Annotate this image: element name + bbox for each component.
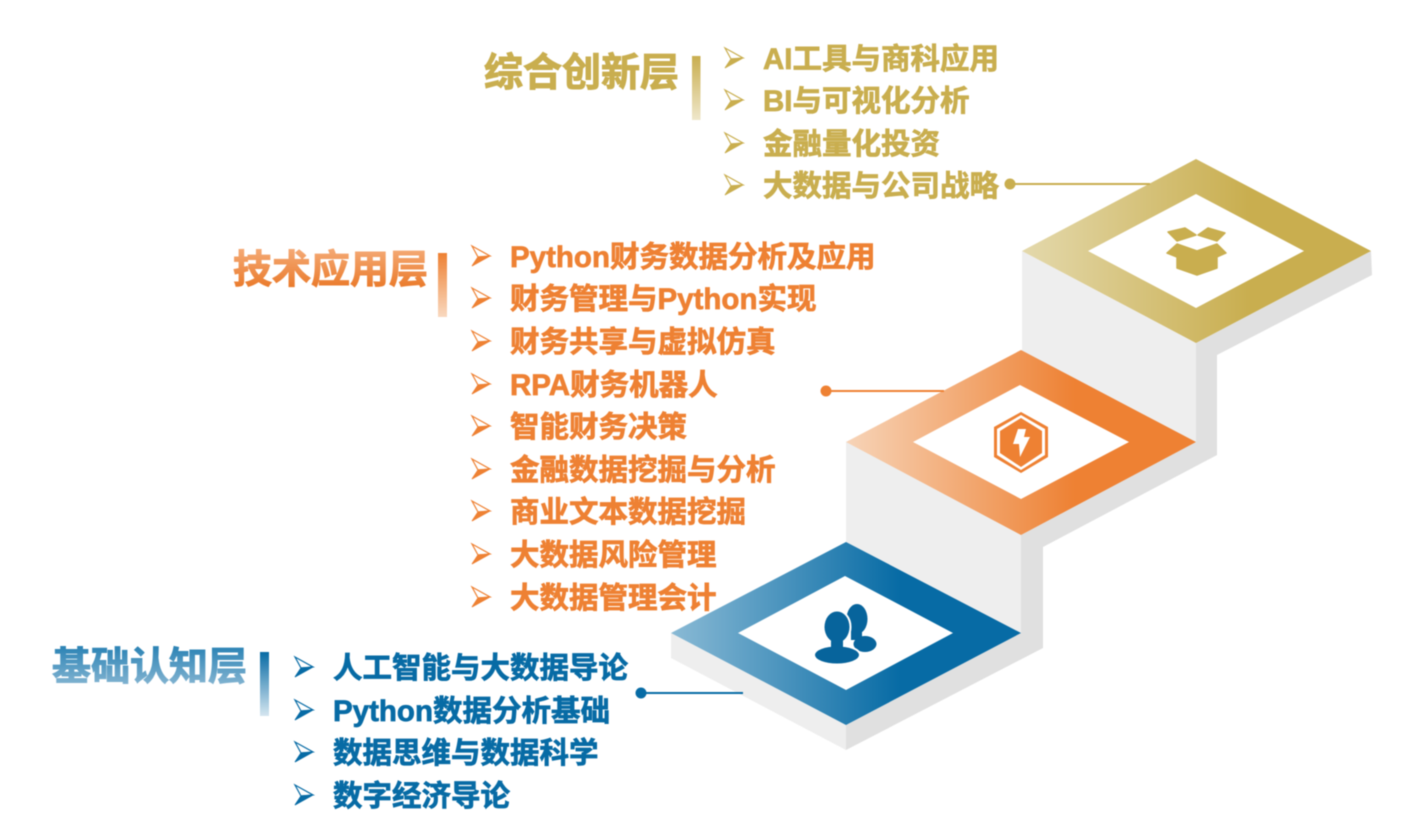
panel: gold layer	[484, 43, 1000, 203]
list: orange: 商业文本数据挖掘	[510, 496, 746, 529]
icon: two people	[815, 604, 876, 664]
orange platform	[846, 350, 1196, 535]
list: orange: Python财务数据分析及应用	[510, 241, 875, 274]
heading: gold: 综合创新层	[484, 52, 679, 95]
title bar: gold	[692, 56, 700, 120]
list: orange: 金融数据挖掘与分析	[510, 454, 776, 487]
connector: gold	[1004, 178, 1150, 190]
gold platform	[1022, 159, 1371, 343]
list: orange: 财务管理与Python实现	[510, 283, 816, 316]
separator	[815, 612, 859, 664]
blue platform	[671, 542, 1021, 725]
panel: orange layer	[233, 241, 875, 615]
connector: orange	[820, 386, 944, 396]
list: orange: 智能财务决策	[510, 411, 687, 444]
list: gold: 金融量化投资	[763, 128, 940, 161]
list: gold	[725, 43, 1000, 203]
list: orange: RPA财务机器人	[510, 369, 718, 402]
list: blue: 人工智能与大数据导论	[333, 652, 629, 685]
connector: blue	[636, 688, 743, 698]
list: orange: 大数据管理会计	[510, 582, 717, 615]
icon: lightning hexagon	[994, 412, 1048, 473]
stair dark faces	[846, 251, 1372, 750]
title bar: orange	[438, 253, 447, 317]
heading: blue: 基础认知层	[52, 646, 247, 689]
staircase	[671, 159, 1372, 750]
title bar: blue	[260, 652, 269, 716]
list: blue: 数据思维与数据科学	[333, 737, 599, 770]
icon: open box	[1167, 228, 1226, 275]
heading: orange: 技术应用层	[233, 249, 428, 292]
stair light faces	[671, 251, 1196, 750]
front person	[815, 612, 859, 664]
list: orange: 大数据风险管理	[510, 539, 717, 572]
list: blue	[295, 652, 629, 813]
back person	[846, 604, 876, 652]
list: gold: BI与可视化分析	[763, 85, 970, 118]
list: gold: AI工具与商科应用	[763, 43, 999, 76]
list: orange: 财务共享与虚拟仿真	[510, 326, 776, 359]
list: gold: 大数据与公司战略	[763, 170, 1000, 203]
list: orange	[472, 241, 875, 615]
list: blue: 数字经济导论	[333, 780, 511, 813]
panel: blue layer	[52, 646, 629, 813]
list: blue: Python数据分析基础	[333, 695, 610, 728]
